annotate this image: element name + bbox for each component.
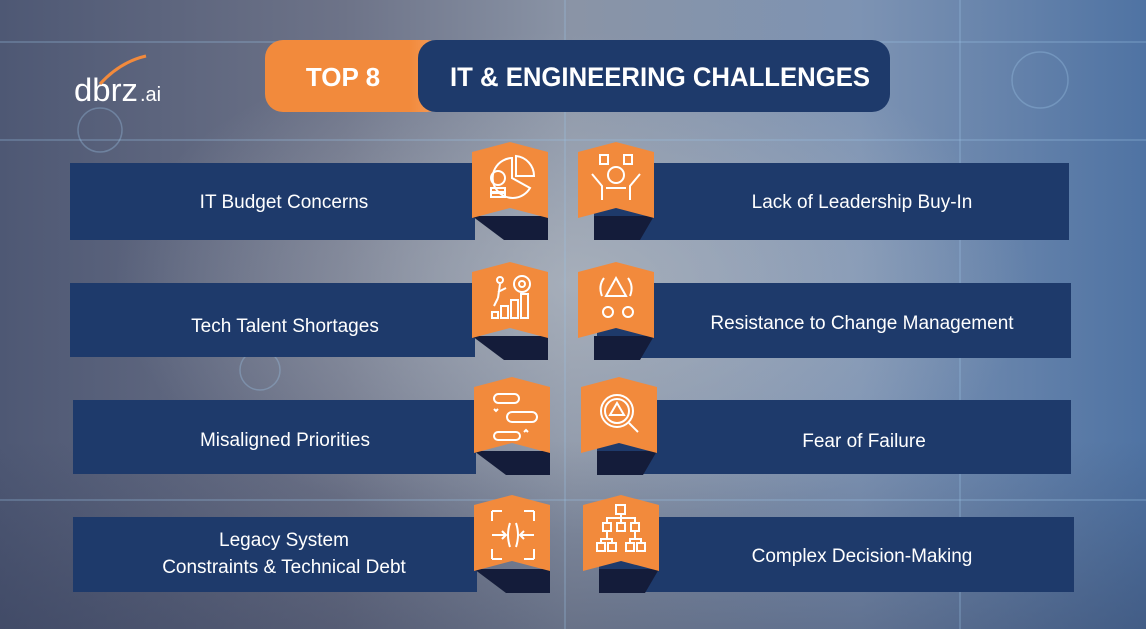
row 1 right: Lack of Leadership Buy-In: Lack of Leadership Buy-In (752, 192, 972, 213)
logo (74, 56, 161, 108)
row 4 right (599, 517, 1074, 592)
heading (418, 40, 890, 112)
row 4 left (73, 517, 477, 592)
icon: talent climbing bars (472, 262, 548, 360)
row 4 left: Constraints & Technical Debt (162, 557, 407, 578)
row 3 right (597, 400, 1071, 474)
logo: dbrz (74, 72, 138, 108)
row 2 left (70, 283, 475, 357)
row 4 left: Legacy System (219, 530, 349, 551)
icon: misaligned priorities (474, 377, 550, 475)
row 1 right: Lack of Leadership Buy-In (594, 163, 1069, 240)
icon: budget pie and coins (472, 142, 548, 240)
row 3 right: Fear of Failure (802, 431, 926, 452)
row 2 right: Resistance to Change Management (710, 313, 1014, 334)
logo: .ai (140, 84, 161, 106)
icon: legacy system converging arrows (474, 495, 550, 593)
icon: decision tree (583, 495, 659, 593)
row 1 left: IT Budget Concerns (70, 163, 475, 240)
row 4 right: Complex Decision-Making (752, 546, 972, 567)
row 3 left: Misaligned Priorities (200, 430, 370, 451)
icon: change management warning gears (578, 262, 654, 360)
row 2 left: Tech Talent Shortages (191, 316, 379, 337)
badge: top 8: TOP 8 (306, 62, 380, 92)
row 1 left: IT Budget Concerns: IT Budget Concerns (200, 192, 368, 213)
title banner (265, 40, 890, 112)
icon: leadership confused person (578, 142, 654, 240)
row 2 right (597, 283, 1071, 358)
heading: IT & ENGINEERING CHALLENGES (450, 62, 870, 92)
badge: top 8 (265, 40, 445, 112)
row 3 left (73, 400, 476, 474)
icon: fear of failure magnifier (581, 377, 657, 475)
